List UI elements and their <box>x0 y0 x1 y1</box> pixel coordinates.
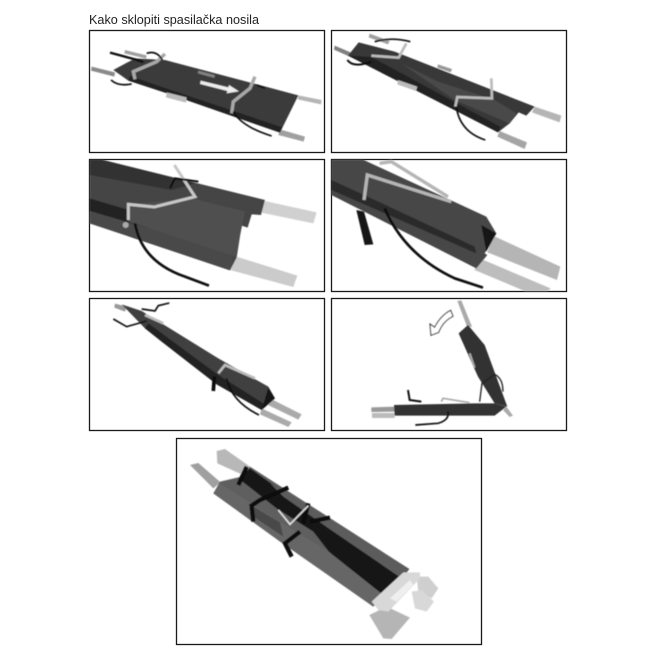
title: Kako sklopiti spasilačka nosila <box>89 13 259 27</box>
panel: step 6, folding in half <box>332 298 566 430</box>
photo: folded stretcher on diagonal <box>113 303 302 427</box>
photo: stretcher folded at hinge <box>371 300 513 425</box>
panel: step 1, open stretcher <box>90 30 324 152</box>
icon: white arrow <box>200 81 239 93</box>
photo: folded bundle tied with straps <box>190 449 438 639</box>
photo: open stretcher with arrows <box>91 50 322 142</box>
panel: step 5, narrow folded stretcher <box>90 298 324 430</box>
panel: step 2, fabric folding <box>332 30 566 152</box>
photo: stretcher with raised struts <box>334 34 561 149</box>
icon: curved outline arrow <box>430 310 453 335</box>
panel: step 3, close-up fold <box>90 160 324 292</box>
photo: folded stretcher end with poles <box>331 160 560 291</box>
panel: step 4, folded sides <box>331 160 566 292</box>
panel: step 7, fully folded and strapped <box>176 438 482 644</box>
photo: close-up of folded end <box>90 160 317 287</box>
